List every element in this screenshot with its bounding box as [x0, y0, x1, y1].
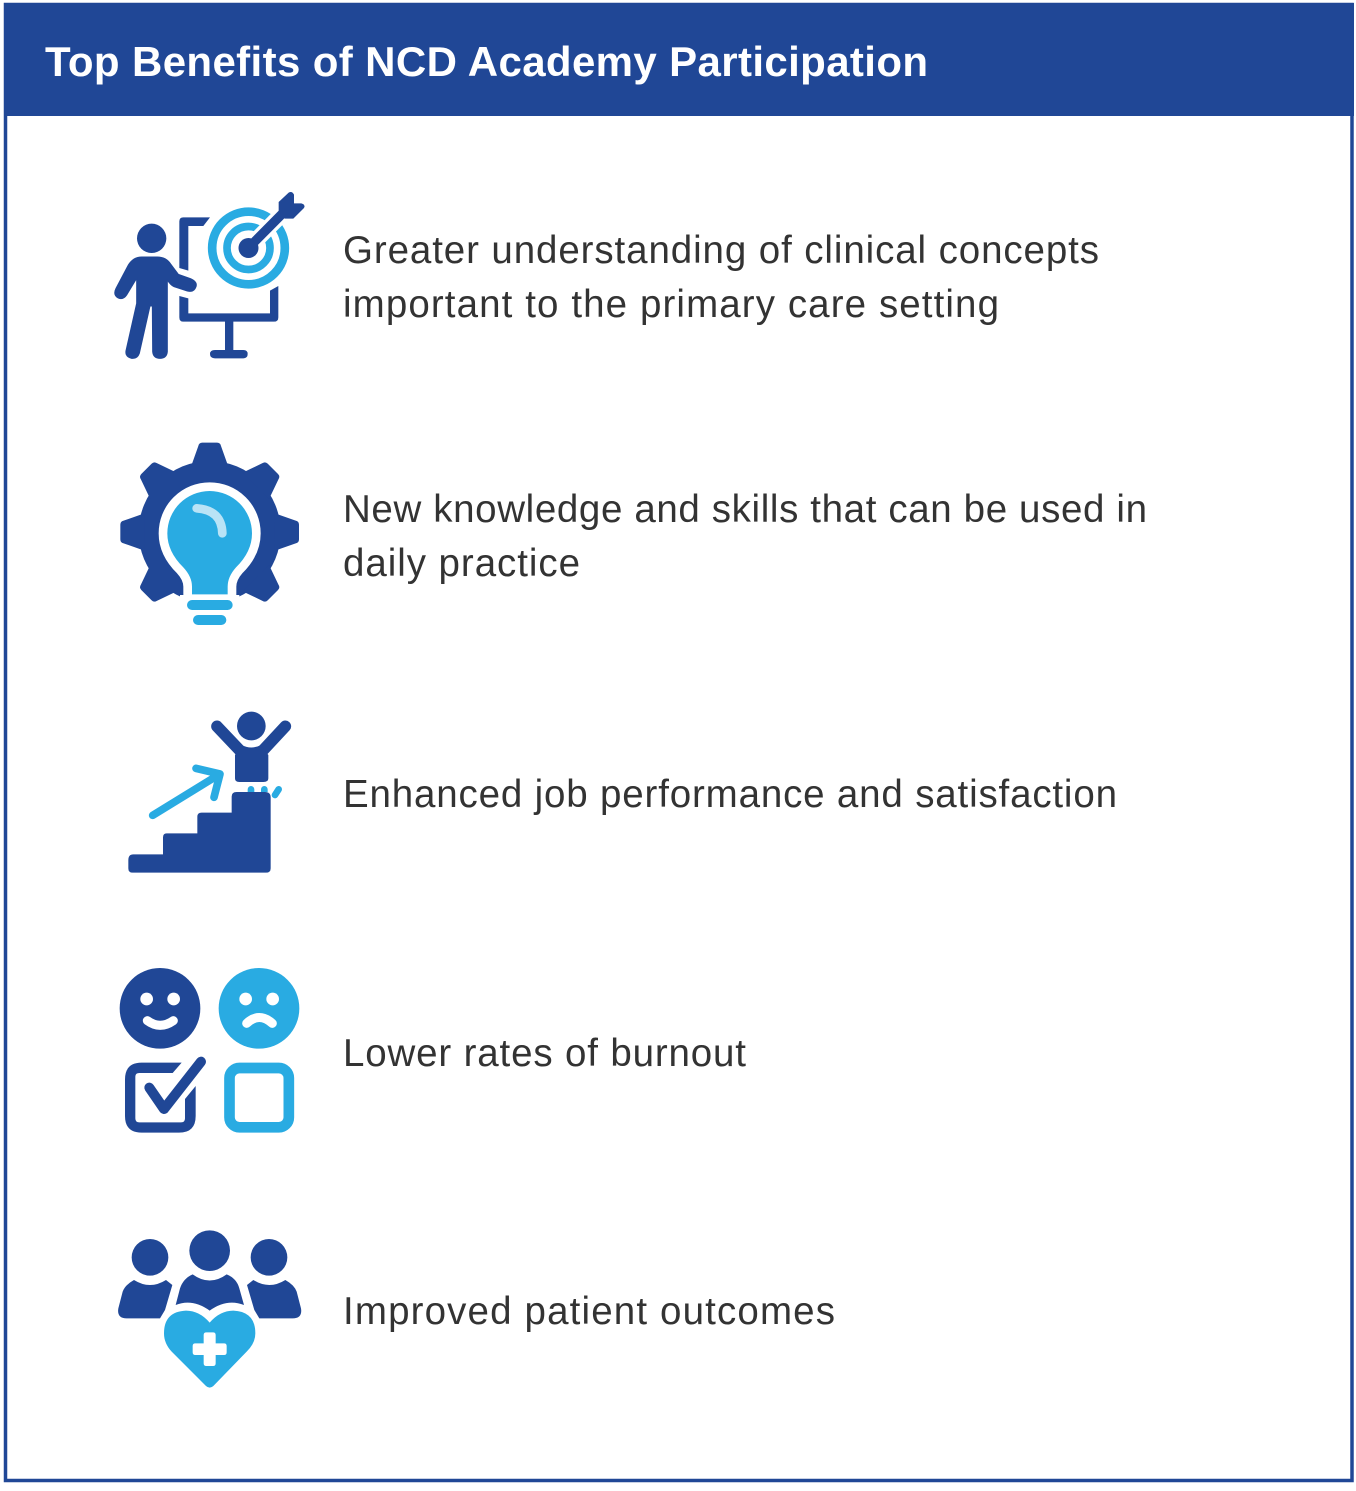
icon: team with heart: [118, 1230, 301, 1388]
benefit text 2: daily practice: [343, 542, 580, 585]
benefit text 5: Improved patient outcomes: [343, 1290, 835, 1333]
icon: gear with light bulb: [120, 443, 299, 625]
benefit text 1: Greater understanding of clinical concepts: [343, 229, 1099, 272]
benefit text 1: [343, 229, 1099, 326]
icon: faces and checkboxes: [120, 968, 299, 1133]
benefit text 1: important to the primary care setting: [343, 283, 999, 326]
benefit text 2: [343, 488, 1147, 585]
header banner: [4, 3, 1354, 116]
benefit text 2: New knowledge and skills that can be used in: [343, 488, 1147, 531]
icon: person on stairs: [128, 712, 285, 873]
title: Top Benefits of NCD Academy Participation: [45, 38, 928, 85]
icon: presenter with target: [115, 192, 305, 358]
benefit text 3: Enhanced job performance and satisfaction: [343, 773, 1117, 816]
benefit text 4: Lower rates of burnout: [343, 1032, 746, 1075]
